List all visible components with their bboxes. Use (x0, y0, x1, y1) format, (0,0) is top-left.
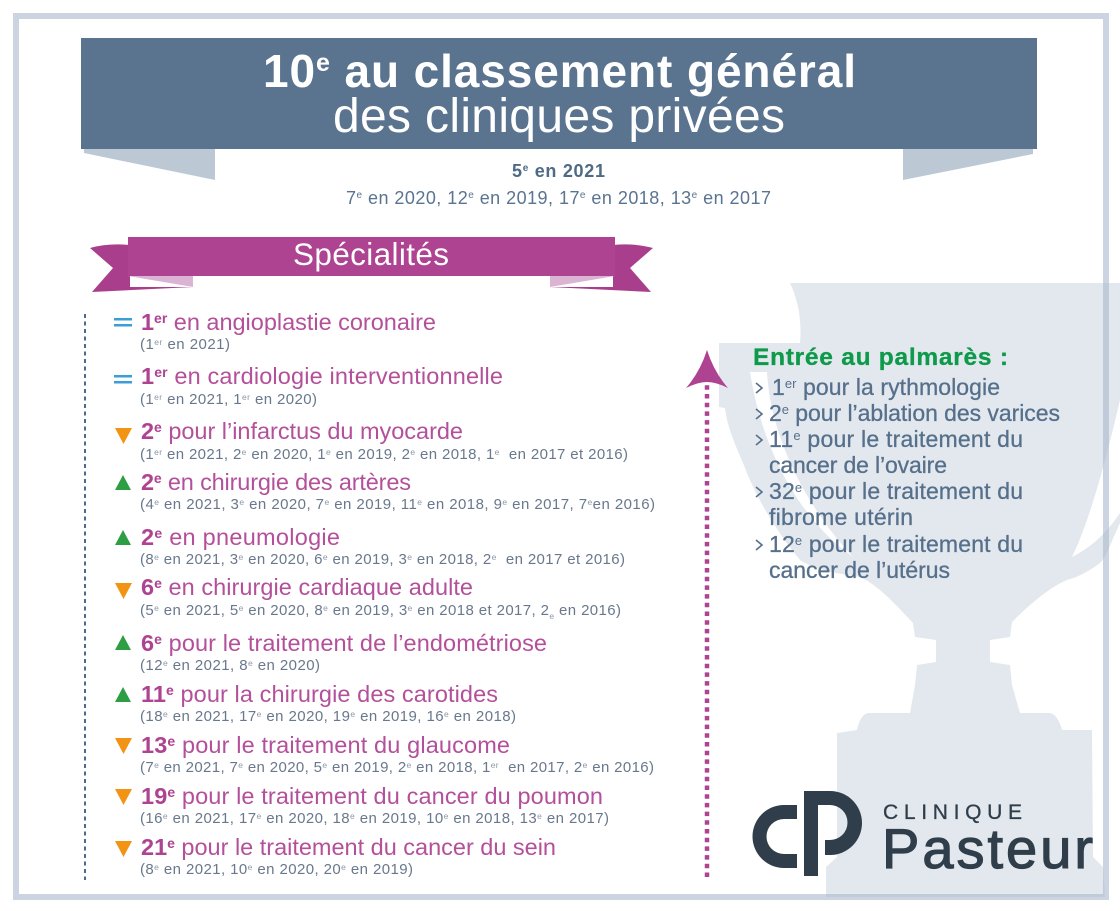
history: e (502, 497, 507, 507)
history: er (242, 392, 250, 402)
history: (1 (140, 336, 154, 353)
logo word CLINIQUE: CLINIQUE (883, 801, 1022, 824)
history: en 2021, 10 (159, 861, 247, 878)
rank: 13 (141, 732, 167, 758)
rank: e (167, 784, 175, 800)
history: (16 (140, 810, 163, 827)
history: e (410, 447, 415, 457)
history: e (323, 552, 328, 562)
history: en 2019, 16 (356, 708, 444, 725)
banner fold left (84, 149, 215, 180)
rank: 6 (141, 574, 154, 600)
entry: rythmologie: er (785, 376, 797, 391)
history: e (444, 709, 449, 719)
rank: en pneumologie (162, 524, 340, 550)
rank: e (154, 575, 162, 591)
rank: er (154, 364, 168, 380)
history: en 2018, 1 (412, 759, 490, 776)
history: e (239, 603, 244, 613)
ranking previous years: e (580, 190, 586, 201)
rank: pour le traitement de l’endométriose (162, 630, 547, 656)
history: en 2019, 11 (330, 496, 417, 513)
history: er (491, 760, 499, 770)
rank: 2 (141, 469, 154, 495)
banner body (81, 38, 1037, 149)
history: e (154, 603, 159, 613)
ranking 2021: 5 (512, 161, 522, 181)
history: e (242, 447, 247, 457)
history: e (154, 497, 159, 507)
title line 1: 10 (263, 45, 315, 97)
history: (1 (140, 391, 154, 408)
history: en 2017, 7 (508, 496, 587, 513)
bullet chevrons (756, 383, 762, 550)
history: e (163, 658, 168, 668)
history: e (492, 552, 497, 562)
history: en 2021, 17 (168, 708, 256, 725)
history: (12 (140, 657, 163, 674)
history: e (495, 447, 500, 457)
icon: down triangle (115, 428, 132, 444)
history: en 2021) (163, 336, 230, 353)
ranking previous years: 7 (346, 188, 356, 208)
title line 1: au classement général (331, 45, 856, 97)
history: e (248, 862, 253, 872)
rank: e (154, 525, 162, 541)
history: e (248, 658, 253, 668)
row: infarctus du myocarde (115, 418, 628, 463)
entry: rythmologie: 1 (772, 374, 785, 400)
panel: new entries (753, 344, 1060, 583)
history: e (154, 552, 159, 562)
history: e (257, 709, 262, 719)
history: en 2018 et 2017, 2 (413, 602, 549, 619)
history: e (408, 603, 413, 613)
ribbon fold right (550, 276, 615, 287)
rank: pour le traitement du cancer du poumon (175, 783, 603, 809)
entry: cancer de l'utérus: 12 (769, 531, 795, 557)
logo: Clinique Pasteur (753, 791, 1093, 880)
history: en 2019, 3 (328, 602, 407, 619)
rank: en angioplastie coronaire (167, 309, 436, 335)
icon: equal (114, 318, 132, 326)
history: e (154, 862, 159, 872)
ranking 2021: e (523, 163, 529, 174)
history: en 2018, 13 (449, 810, 537, 827)
history: e (350, 811, 355, 821)
rank: en chirurgie des artères (162, 469, 411, 495)
history: e (407, 552, 412, 562)
history: e (238, 760, 243, 770)
history: e (444, 811, 449, 821)
icon: down triangle (115, 789, 132, 805)
history: er (154, 392, 162, 402)
history: (1 (140, 446, 154, 463)
entry: cancer de l'ovaire: cancer de l’ovaire (769, 452, 947, 478)
history: en 2018, 2 (412, 551, 491, 568)
icon: up triangle (115, 530, 131, 545)
rank: pour le traitement du glaucome (175, 732, 510, 758)
panel: specialties list (85, 309, 655, 880)
history: e (322, 760, 327, 770)
history: en 2019) (346, 861, 413, 878)
row: angioplastie coronaire (114, 309, 436, 353)
history: en 2019, 2 (331, 446, 410, 463)
history: e (163, 709, 168, 719)
ranking previous years: e (468, 190, 474, 201)
history: en 2020, 8 (244, 602, 323, 619)
history: (8 (140, 861, 154, 878)
history: e (417, 497, 422, 507)
history: en 2021, 17 (168, 810, 256, 827)
row: chirurgie des artères (115, 469, 655, 513)
trophy silhouette background (719, 283, 1120, 897)
ranking previous years: e (356, 190, 362, 201)
title line 2: des cliniques privées (333, 90, 785, 143)
rank: e (154, 470, 162, 486)
banner fold right (903, 149, 1033, 180)
row: glaucome (115, 732, 654, 776)
history: er (154, 447, 162, 457)
rank: er (154, 310, 168, 326)
history: en 2020, 7 (245, 496, 324, 513)
history: er (154, 337, 162, 347)
entry: rythmologie: pour la rythmologie (797, 374, 1000, 400)
entry: cancer de l'ovaire: pour le traitement du (801, 426, 1023, 452)
rank: e (167, 835, 175, 851)
history: en 2021, 5 (159, 602, 238, 619)
row: cancer du sein (115, 834, 556, 878)
history: en 2020) (250, 391, 317, 408)
arrow: rising dotted arrow (686, 350, 728, 877)
history: en 2021, 3 (159, 551, 238, 568)
history: e (323, 603, 328, 613)
history: e (256, 811, 261, 821)
icon: up triangle (115, 687, 131, 702)
icon: up triangle (115, 635, 131, 650)
row: chirurgie des carotides (115, 681, 516, 725)
entry: cancer de l'utérus (769, 531, 1023, 583)
history: e (537, 811, 542, 821)
overall ranking history (346, 161, 771, 208)
rank: 1 (141, 363, 154, 389)
row: cancer du poumon (115, 783, 609, 827)
rank: e (154, 419, 162, 435)
specialties ribbon (90, 236, 653, 292)
history: e (239, 497, 244, 507)
entry: cancer de l'ovaire: e (793, 428, 801, 443)
ribbon heading: Spécialités (293, 236, 449, 272)
history: en 2021, 8 (168, 657, 248, 674)
entry: ablation des varices: pour l’ablation des varices (789, 400, 1060, 426)
ranking 2021: en 2021 (529, 161, 605, 181)
rank: pour le traitement du cancer du sein (175, 834, 556, 860)
entry: fibrome utérin: 32 (769, 478, 795, 504)
entry: ablation des varices: 2 (769, 400, 782, 426)
dotted vertical rule (84, 314, 86, 880)
rank: 2 (141, 524, 154, 550)
heading: Entrée au palmarès : (753, 344, 1008, 371)
entry: cancer de l'ovaire (769, 426, 1023, 478)
rank: pour l’infarctus du myocarde (162, 418, 463, 444)
history: en 2021, 2 (162, 446, 241, 463)
rank: pour la chirurgie des carotides (174, 681, 498, 707)
history: en 2020, 20 (253, 861, 341, 878)
rank: 6 (141, 630, 154, 656)
history: en 2016) (588, 759, 654, 776)
rank: e (166, 682, 174, 698)
title banner (81, 38, 1037, 180)
rank: 19 (141, 783, 167, 809)
entry: fibrome utérin: fibrome utérin (769, 504, 913, 530)
ranking previous years: en 2020, 12 (362, 188, 468, 208)
history: en 2020) (253, 657, 320, 674)
history: e (549, 611, 554, 621)
icon: down triangle (115, 841, 132, 857)
icon: equal (114, 375, 132, 384)
history: en 2019, 2 (327, 759, 406, 776)
history: en 2017) (542, 810, 609, 827)
history: e (350, 709, 355, 719)
logo mark CP (753, 791, 862, 876)
row: chirurgie cardiaque adulte (115, 574, 621, 621)
ribbon tail right (550, 244, 653, 292)
rank: e (167, 733, 175, 749)
history: e (341, 862, 346, 872)
history: en 2016) (554, 602, 621, 619)
ribbon fold left (128, 276, 193, 287)
ranking previous years: en 2018, 13 (586, 188, 691, 208)
ranking previous years: en 2019, 17 (474, 188, 579, 208)
entry: fibrome utérin: pour le traitement du (802, 478, 1023, 504)
history: en 2016) (593, 496, 655, 513)
history: en 2018, 1 (415, 446, 494, 463)
rank: en cardiologie interventionnelle (168, 363, 503, 389)
history: e (407, 760, 412, 770)
ribbon body (128, 237, 615, 276)
history: (18 (140, 708, 163, 725)
history: en 2020, 5 (243, 759, 322, 776)
ranking previous years: en 2017 (698, 188, 771, 208)
entry: cancer de l'utérus: cancer de l’utérus (769, 557, 950, 583)
title line 1: e (316, 49, 330, 77)
rank: en chirurgie cardiaque adulte (162, 574, 473, 600)
entry: cancer de l'utérus: pour le traitement du (802, 531, 1023, 557)
rank: e (154, 631, 162, 647)
entry: cancer de l'utérus: e (795, 533, 802, 548)
rank: 1 (141, 309, 154, 335)
history: e (583, 760, 588, 770)
history: en 2018) (449, 708, 516, 725)
history: en 2017 et 2016) (500, 446, 628, 463)
history: en 2018, 9 (422, 496, 502, 513)
history: en 2019, 10 (355, 810, 443, 827)
history: e (324, 497, 329, 507)
icon: down triangle (115, 583, 132, 599)
history: en 2020, 6 (244, 551, 322, 568)
row: pneumologie (115, 524, 625, 568)
history: (4 (140, 496, 154, 513)
rank: 21 (141, 834, 167, 860)
history: e (154, 760, 159, 770)
rank: 11 (141, 681, 166, 707)
history: en 2020, 1 (247, 446, 326, 463)
ribbon tail left (90, 244, 193, 292)
history: en 2019, 3 (328, 551, 407, 568)
icon: up triangle (115, 475, 131, 490)
rank: 2 (141, 418, 154, 444)
row: endométriose (115, 630, 547, 674)
history: (7 (140, 759, 154, 776)
row: cardiologie interventionnelle (114, 363, 503, 408)
logo word Pasteur: Pasteur (882, 817, 1093, 880)
entry: ablation des varices: e (782, 402, 789, 417)
history: (5 (140, 602, 154, 619)
entry: fibrome utérin: e (795, 480, 802, 495)
history: en 2021, 7 (159, 759, 238, 776)
history: (8 (140, 551, 154, 568)
history: e (588, 497, 593, 507)
icon: down triangle (115, 738, 132, 754)
history: en 2021, 3 (159, 496, 239, 513)
history: e (163, 811, 168, 821)
history: en 2020, 18 (262, 810, 350, 827)
history: en 2017, 2 (499, 759, 582, 776)
entry: cancer de l'ovaire: 11 (769, 426, 793, 452)
history: e (326, 447, 331, 457)
history: en 2021, 1 (163, 391, 242, 408)
history: en 2017 et 2016) (497, 551, 625, 568)
history: en 2020, 19 (262, 708, 350, 725)
history: e (238, 552, 243, 562)
entry: fibrome utérin (769, 478, 1023, 530)
ranking previous years: e (692, 190, 698, 201)
